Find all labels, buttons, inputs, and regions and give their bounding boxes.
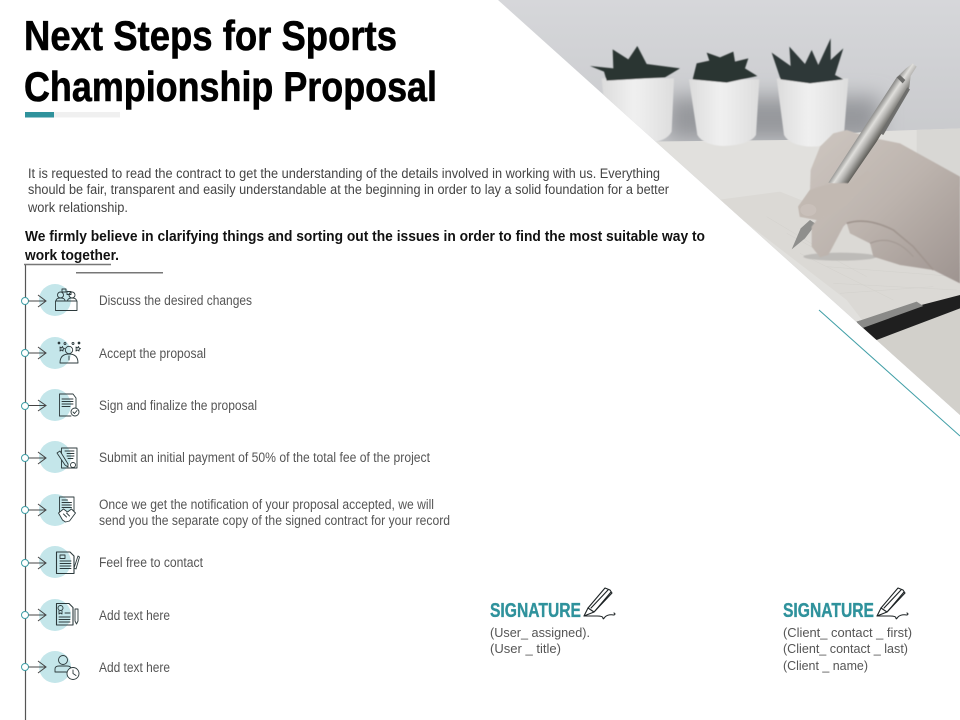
step 5: signed contract copy xyxy=(22,494,450,528)
label: Once we get the notification of your proposal accepted, we will xyxy=(99,497,434,512)
pen tip xyxy=(792,220,816,249)
bold statement: We firmly believe in clarifying things and sorting out the issues in order to find the most suitable way to xyxy=(25,229,705,245)
teal diagonal accent line xyxy=(819,310,960,436)
label: Submit an initial payment of 50% of the total fee of the project xyxy=(99,450,430,465)
client details xyxy=(783,625,912,673)
step 6: feel free to contact xyxy=(22,546,203,578)
thumb over pen xyxy=(798,182,848,218)
client details: (Client_ contact _ last) xyxy=(783,641,908,656)
user details: (User _ title) xyxy=(490,641,561,656)
step 2: accept the proposal xyxy=(22,337,206,369)
hand xyxy=(798,130,960,283)
intro paragraph: It is requested to read the contract to get the understanding of the details involved in working with us. Everything xyxy=(28,166,660,181)
title: Next Steps for Sports xyxy=(24,12,397,59)
label: Add text here xyxy=(99,608,170,623)
icon: contract with handshake xyxy=(58,497,76,522)
table xyxy=(656,130,960,340)
label: Accept the proposal xyxy=(99,346,206,361)
icon: person with clock xyxy=(55,656,79,680)
notebook spine xyxy=(857,295,960,340)
succulents xyxy=(590,46,680,81)
bold statement: work together. xyxy=(24,248,119,264)
timeline rail xyxy=(24,264,163,720)
intro paragraph: should be fair, transparent and easily understandable at the beginning in order to lay a solid foundation for a better xyxy=(28,182,669,197)
label: Sign and finalize the proposal xyxy=(99,398,257,413)
signature block: client xyxy=(783,588,912,673)
intro paragraph xyxy=(27,166,669,215)
client details: (Client_ contact _ first) xyxy=(783,625,912,640)
pots xyxy=(602,78,674,143)
icon: meeting people xyxy=(56,289,77,310)
step 4: submit an initial payment xyxy=(22,441,430,473)
icon: pen signing xyxy=(584,588,615,619)
user details: (User_ assigned). xyxy=(490,625,590,640)
step 3: sign and finalize the proposal xyxy=(22,389,257,421)
label xyxy=(99,497,450,528)
signature heading: SIGNATURE xyxy=(783,600,874,622)
icon: pen signing xyxy=(877,588,908,619)
icon: certificate and pen xyxy=(56,604,78,625)
notebook page xyxy=(717,192,960,322)
user details xyxy=(490,625,590,656)
pen body xyxy=(828,63,917,185)
icon: document with check xyxy=(60,394,79,416)
step 7: add text here xyxy=(22,599,170,631)
photo: hand writing with pen and three potted plants xyxy=(498,0,960,420)
intro paragraph: work relationship. xyxy=(27,200,128,215)
icon: contract with pen and seal xyxy=(57,448,77,468)
label: Feel free to contact xyxy=(99,555,203,570)
step 8: add text here xyxy=(22,651,170,683)
label: Add text here xyxy=(99,660,170,675)
title: Championship Proposal xyxy=(24,63,437,110)
signature block: user xyxy=(490,588,615,656)
bold statement xyxy=(24,229,705,264)
label: Discuss the desired changes xyxy=(99,293,252,308)
client details: (Client _ name) xyxy=(783,658,868,673)
title underline accent xyxy=(25,112,120,118)
title xyxy=(24,12,437,110)
icon: person with stars xyxy=(58,342,80,363)
label: send you the separate copy of the signed contract for your record xyxy=(99,513,450,528)
signature heading: SIGNATURE xyxy=(490,600,581,622)
icon: form and pencil xyxy=(56,552,80,574)
step 1: discuss the desired changes xyxy=(22,284,252,316)
wall shadow behind pots xyxy=(667,97,880,140)
